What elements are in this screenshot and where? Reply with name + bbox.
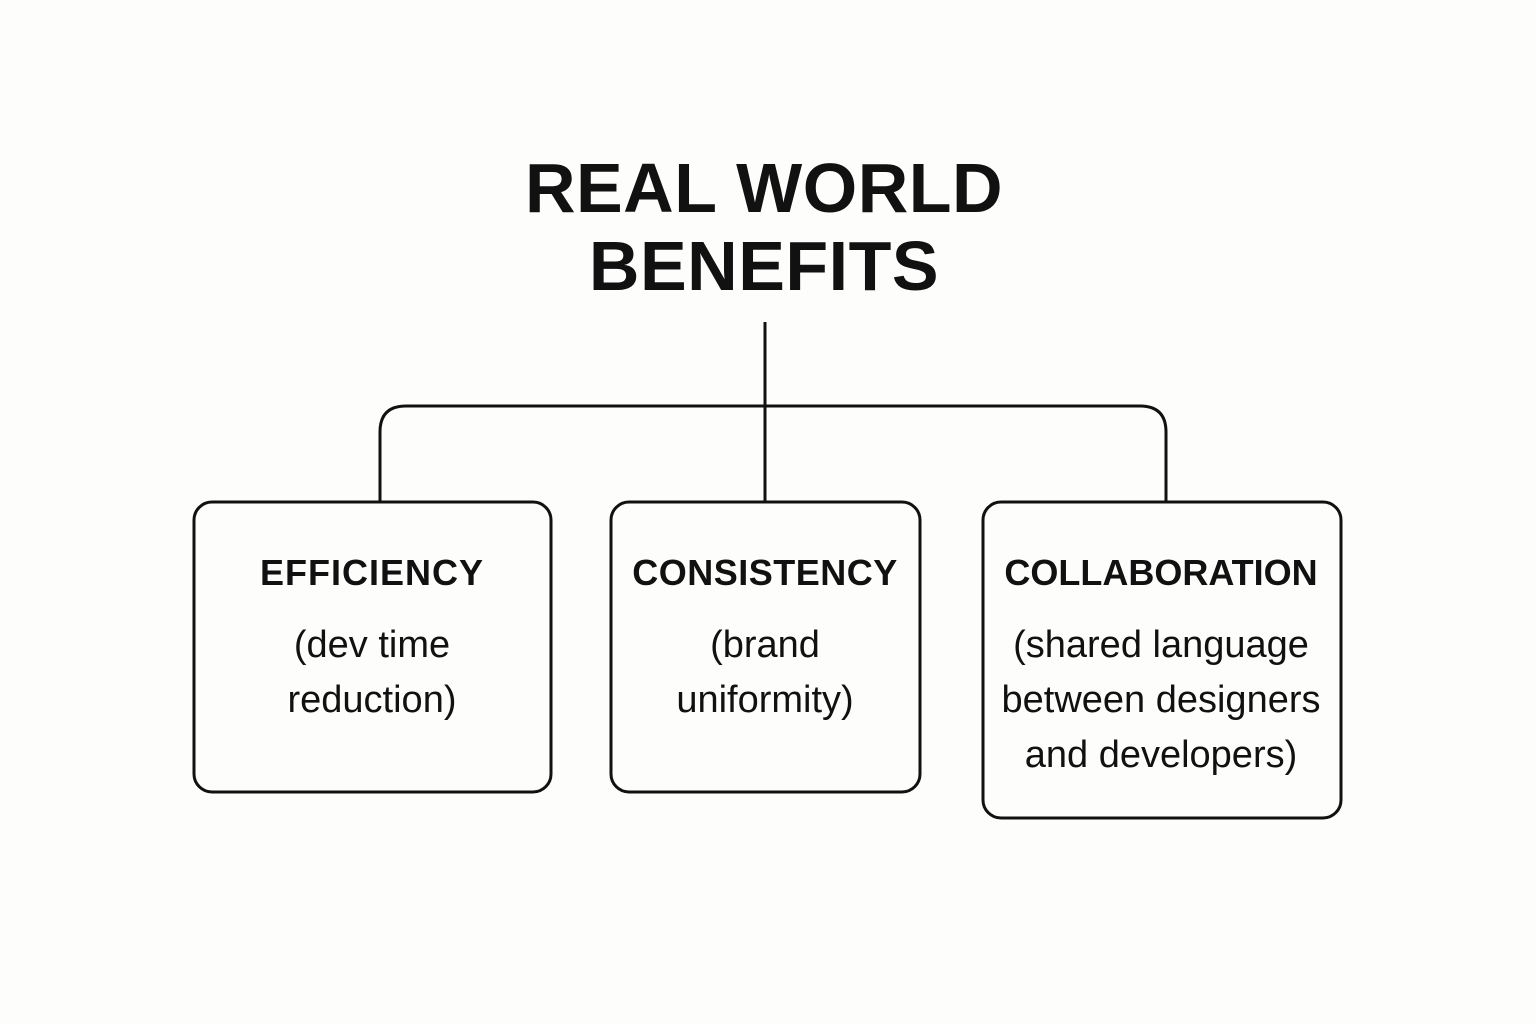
panel: collaboration (983, 502, 1341, 818)
panel: efficiency: (dev time (294, 624, 450, 666)
panel: consistency (611, 502, 920, 792)
title: REAL WORLD (525, 149, 1003, 227)
connector lines (380, 322, 1166, 502)
panel: efficiency: reduction) (288, 679, 456, 721)
panel: consistency: (brand (710, 624, 820, 666)
panel: collaboration: and developers) (1025, 734, 1297, 776)
panel: collaboration: COLLABORATION (1004, 552, 1318, 593)
panel: collaboration: between designers (1002, 679, 1320, 721)
title (525, 149, 1003, 305)
panel: efficiency: EFFICIENCY (260, 552, 484, 593)
title: BENEFITS (589, 227, 939, 305)
panel: efficiency (194, 502, 551, 792)
panel: consistency: CONSISTENCY (632, 552, 898, 593)
panel: consistency: uniformity) (676, 679, 854, 721)
panel: collaboration: (shared language (1013, 624, 1309, 666)
